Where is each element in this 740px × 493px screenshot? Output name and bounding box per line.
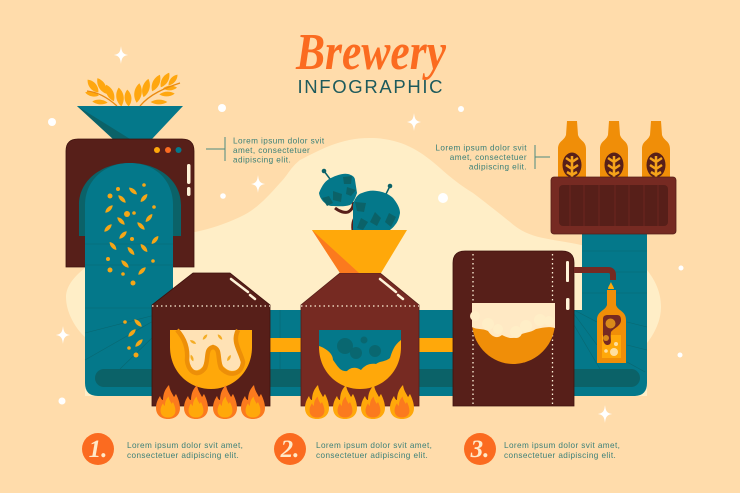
callout: top left: adipiscing elit.	[233, 156, 291, 164]
title: INFOGRAPHIC	[298, 76, 442, 97]
hops	[319, 169, 400, 230]
conveyor: teal pipes	[85, 230, 647, 396]
title	[295, 24, 447, 97]
machine 4: fermenter	[453, 251, 574, 406]
kettle bowl	[170, 330, 252, 389]
callout: top left: amet, consectetuer	[233, 146, 310, 155]
callout: top right: Lorem ipsum dolor svit	[435, 144, 527, 152]
background blob	[66, 138, 661, 396]
machine 2: mash kettle	[152, 273, 270, 406]
fermenter bowl	[470, 303, 555, 364]
callout: top right	[435, 144, 550, 172]
step 3: Lorem ipsum dolor svit amet,	[504, 441, 620, 450]
pipe and tap	[574, 270, 613, 280]
hopper: hops	[312, 230, 407, 273]
step 3	[464, 433, 620, 465]
beer drop	[608, 282, 614, 289]
title: Brewery	[295, 24, 447, 81]
callout: top right: adipiscing elit.	[469, 162, 527, 172]
callout: top left: Lorem ipsum dolor svit	[233, 136, 325, 146]
beer bottles	[558, 121, 670, 178]
falling grain	[103, 183, 160, 358]
hop kettle bowl	[319, 330, 401, 389]
hopper: grain	[77, 106, 183, 139]
flames	[156, 385, 414, 419]
step 1: Lorem ipsum dolor svit amet,	[127, 441, 243, 450]
wheat	[85, 71, 180, 107]
step 2	[274, 433, 432, 465]
callout: top left	[206, 136, 325, 164]
indicator lights	[154, 147, 182, 153]
callout: top right: amet, consectetuer	[450, 153, 527, 162]
step 3: consectetuer adipiscing elit.	[504, 451, 616, 460]
filling bottle	[597, 290, 626, 363]
step 1: 1.	[89, 436, 107, 463]
sparkles and dots	[48, 46, 684, 423]
step 2: consectetuer adipiscing elit.	[316, 451, 428, 460]
step 3: 3.	[470, 436, 489, 463]
machine 1: grain mill	[66, 139, 194, 358]
step 2: Lorem ipsum dolor svit amet,	[316, 441, 432, 450]
step 1: consectetuer adipiscing elit.	[127, 451, 239, 460]
step 1	[82, 433, 243, 465]
bottle crate	[551, 177, 676, 234]
step 2: 2.	[280, 436, 299, 463]
machine 3: hop kettle	[301, 273, 419, 406]
